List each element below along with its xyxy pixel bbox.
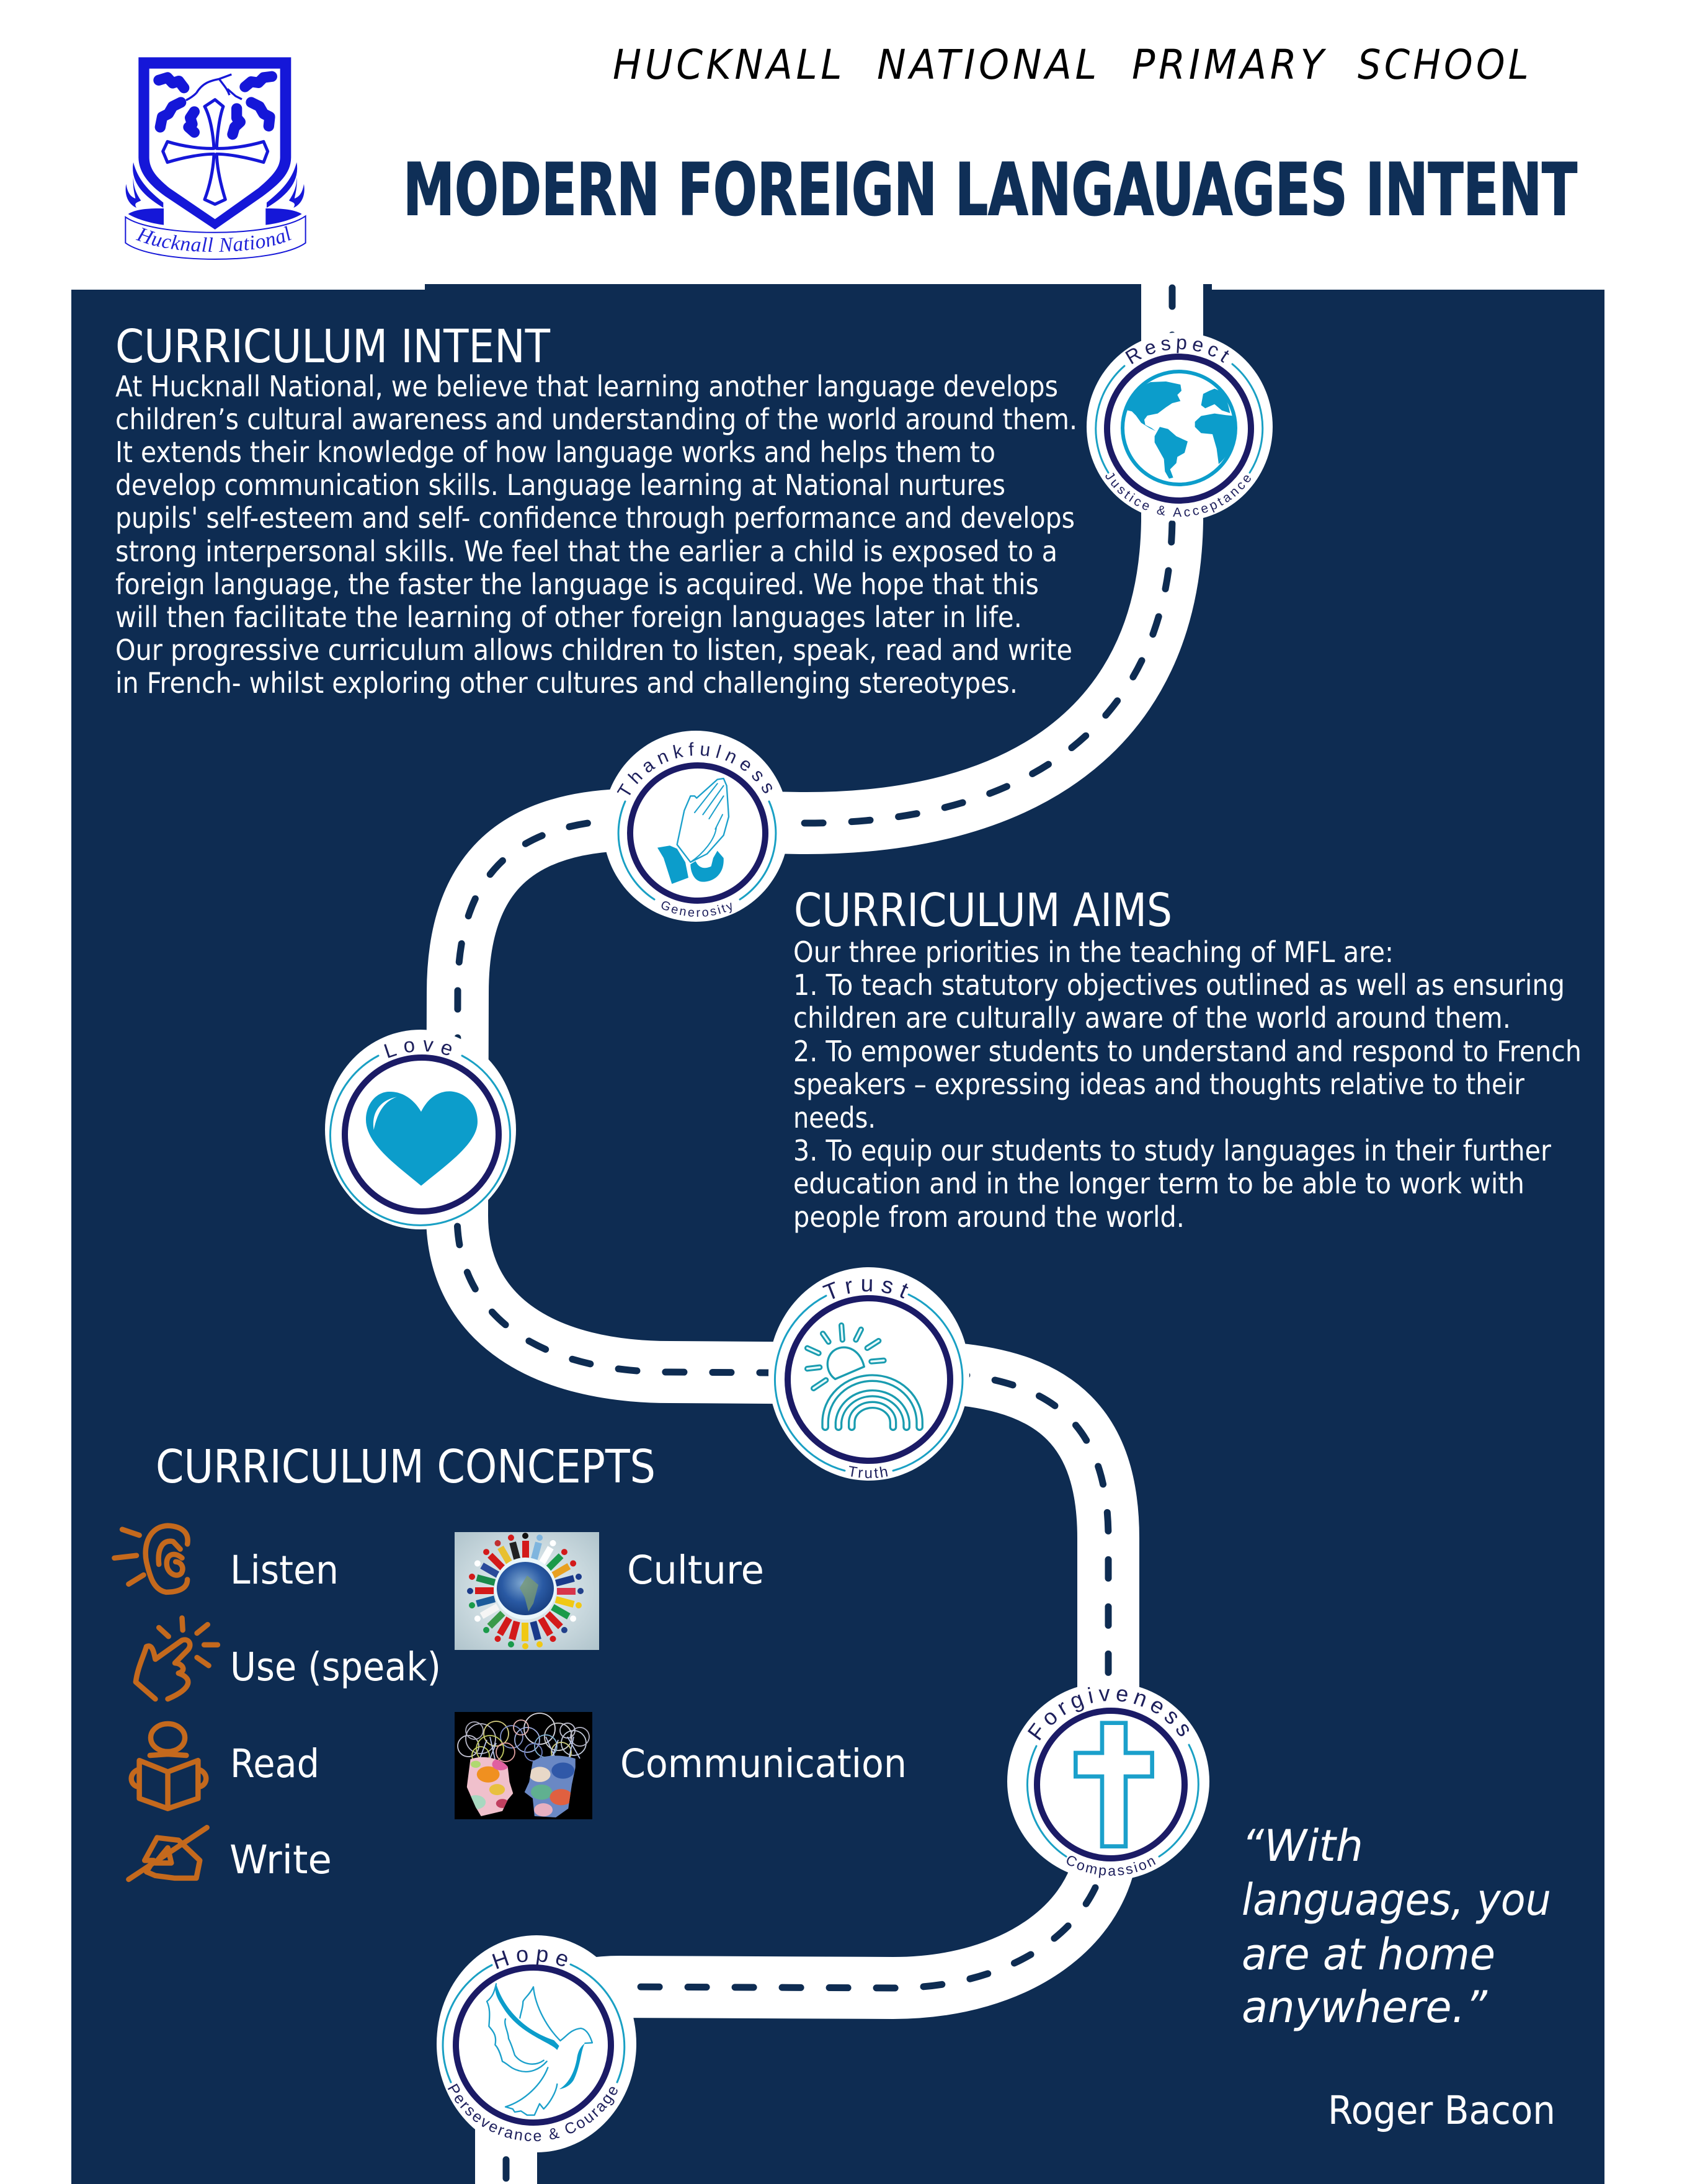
badge: love	[325, 1030, 516, 1229]
text block: curriculum aims: 1. To teach statutory objectives outlined as well as ensuring	[793, 968, 1565, 1002]
label: culture: Culture	[627, 1548, 764, 1593]
road	[457, 284, 1172, 2184]
badge: respect: Respect	[1125, 339, 1229, 364]
badge: hope: Perseverance & Courage	[448, 2084, 618, 2141]
quote attribution: Roger Bacon	[1328, 2088, 1555, 2133]
quote: are at home	[1242, 1929, 1495, 1980]
text block: curriculum aims: 3. To equip our students to study languages in their further	[793, 1134, 1551, 1167]
school name: PRIMARY	[1132, 41, 1327, 89]
icon: person reading	[131, 1724, 206, 1809]
badge: thankfulness	[607, 731, 785, 922]
badge: trust: Trust	[822, 1279, 908, 1299]
quote: languages, you	[1242, 1874, 1551, 1925]
text block: curriculum intent: Our progressive curriculum allows children to listen, speak, read and write	[115, 633, 1072, 667]
text block: curriculum intent: At Hucknall National, we believe that learning another language develops	[115, 370, 1058, 403]
text block: curriculum intent: It extends their knowledge of how language works and helps them to	[115, 435, 995, 469]
heading: curriculum intent: CURRICULUM INTENT	[115, 320, 551, 373]
quote: “With	[1242, 1821, 1363, 1871]
heading: curriculum concepts: CURRICULUM CONCEPTS	[156, 1440, 656, 1494]
icon: ear	[114, 1526, 188, 1592]
image: culture globe with flag people	[455, 1532, 599, 1650]
label: listen: Listen	[230, 1548, 339, 1593]
badge: respect	[1087, 332, 1273, 521]
quote	[1242, 1821, 1551, 2033]
text block: curriculum aims: 2. To empower students to understand and respond to French	[793, 1035, 1582, 1068]
text block: curriculum intent: develop communication skills. Language learning at National nurtures	[115, 468, 1005, 502]
text block: curriculum intent: in French- whilst exploring other cultures and challenging stereotypes.	[115, 666, 1018, 700]
text block: curriculum aims: people from around the world.	[793, 1200, 1185, 1234]
label: read: Read	[230, 1741, 319, 1786]
school name: HUCKNALL	[613, 41, 845, 89]
school crest: Hucknall National	[135, 226, 291, 252]
text block: curriculum intent: strong interpersonal skills. We feel that the earlier a child is exposed to a	[115, 535, 1057, 568]
navy background panel	[71, 284, 1604, 2184]
text block: curriculum intent: foreign language, the faster the language is acquired. We hope that this	[115, 568, 1039, 601]
badge: thankfulness: Generosity	[661, 901, 732, 917]
text block: curriculum aims: Our three priorities in the teaching of MFL are:	[793, 935, 1394, 969]
icon: clicking hand	[136, 1618, 218, 1699]
text block: curriculum aims: needs.	[793, 1101, 876, 1134]
text block: curriculum intent: pupils' self-esteem and self- confidence through performance and develops	[115, 501, 1075, 535]
badge: love: Love	[384, 1040, 452, 1058]
badge: trust	[768, 1267, 969, 1481]
school name: NATIONAL	[877, 41, 1100, 89]
label: write: Write	[229, 1837, 332, 1883]
badge: thankfulness: Thankfulness	[616, 742, 772, 795]
text block: curriculum intent: children’s cultural awareness and understanding of the world around them.	[115, 403, 1077, 436]
badge: hope: Hope	[492, 1949, 567, 1969]
badge: hope	[437, 1935, 636, 2152]
badge: trust: Truth	[849, 1466, 888, 1479]
badge: forgiveness: Forgiveness	[1027, 1687, 1189, 1741]
badge: forgiveness	[1007, 1687, 1209, 1878]
badge: respect: Justice & Acceptance	[1105, 473, 1251, 517]
heading: curriculum aims: CURRICULUM AIMS	[794, 884, 1172, 937]
text block: curriculum aims: speakers – expressing ideas and thoughts relative to their	[793, 1067, 1524, 1101]
text block: curriculum intent	[115, 370, 1077, 700]
image: communication heads	[455, 1712, 592, 1820]
text block: curriculum aims	[793, 935, 1582, 1234]
label: use speak: Use (speak)	[230, 1644, 441, 1690]
label: communication: Communication	[620, 1741, 907, 1786]
school name	[613, 41, 1532, 89]
text block: curriculum aims: children are culturally aware of the world around them.	[793, 1001, 1511, 1035]
school name: SCHOOL	[1358, 41, 1532, 89]
text block: curriculum aims: education and in the longer term to be able to work with	[793, 1167, 1524, 1200]
badge: forgiveness: Compassion	[1067, 1856, 1156, 1878]
text block: curriculum intent: will then facilitate the learning of other foreign languages later in life.	[115, 600, 1022, 634]
school crest	[125, 57, 306, 260]
quote: anywhere.”	[1242, 1982, 1488, 2033]
icon: hand writing	[128, 1827, 207, 1879]
